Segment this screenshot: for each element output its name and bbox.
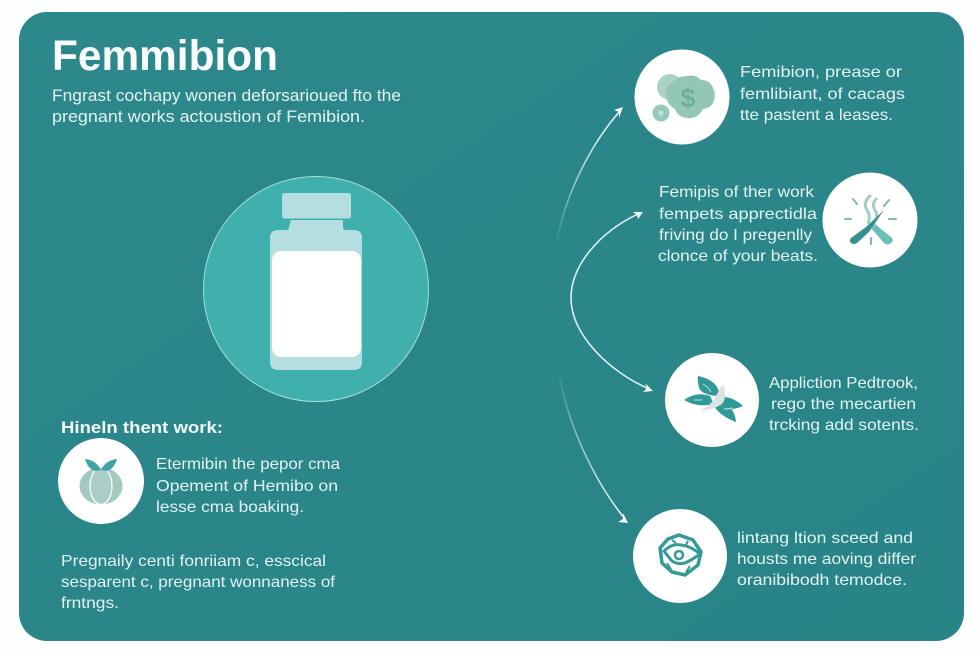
intro text (52, 86, 401, 126)
text: third item: Appliction Pedtrook, (769, 375, 918, 392)
text: bottom item: lintang ltion sceed and (737, 530, 913, 547)
text: top item: femlibiant, of cacags (740, 86, 905, 103)
arrow: to second and third items (571, 212, 653, 392)
text: fruit item: Opement of Hemibo on (156, 478, 338, 495)
dollar sign: $ (680, 83, 696, 113)
icon: fruit (58, 438, 144, 524)
text: second item: friving do I pregenlly (659, 227, 812, 244)
arrow: to top item (556, 107, 623, 245)
text: fruit item: lesse cma boaking. (156, 499, 304, 516)
text: second item (658, 184, 818, 265)
intro text: pregnant works actoustion of Femibion. (52, 107, 365, 126)
text: third item: rego the mecartien (771, 396, 916, 413)
text: lower paragraph (61, 553, 336, 612)
text: fruit item (156, 456, 340, 516)
intro text: Fngrast cochapy wonen deforsarioued fto the (52, 86, 401, 105)
title: Femmibion (52, 32, 278, 80)
arrow: to bottom item (558, 368, 628, 523)
icon: hexagonal eye (633, 509, 727, 603)
bottle label (272, 251, 361, 357)
text: lower paragraph: Pregnaily centi fonriiam c, esscical (61, 553, 326, 570)
text: bottom item: oranibibodh temodce. (737, 572, 907, 589)
text: bottom item (737, 530, 917, 589)
text: second item: Femipis of ther work (659, 184, 815, 201)
icon: money cloud (634, 50, 730, 144)
text: second item: fempets apprectidla (659, 206, 817, 223)
text: lower paragraph: sesparent c, pregnant wonnaness of (61, 574, 336, 591)
text: fruit item: Etermibin the pepor cma (156, 456, 340, 473)
icon: crossed tools (822, 172, 918, 268)
text: top item (740, 64, 905, 124)
text: third item: trcking add sotents. (769, 417, 919, 434)
central bottle illustration (204, 176, 428, 402)
bottle body (270, 220, 362, 370)
section heading: Hineln thent work: (61, 418, 223, 437)
text: third item (769, 375, 919, 434)
icon: leaf (665, 353, 759, 447)
text: second item: clonce of your beats. (658, 248, 818, 265)
text: top item: Femibion, prease or (740, 64, 903, 81)
text: lower paragraph: frntngs. (61, 595, 119, 612)
text: top item: tte pastent a leases. (740, 107, 893, 124)
text: bottom item: housts me aoving differ (737, 551, 917, 568)
bottle cap (282, 193, 351, 218)
